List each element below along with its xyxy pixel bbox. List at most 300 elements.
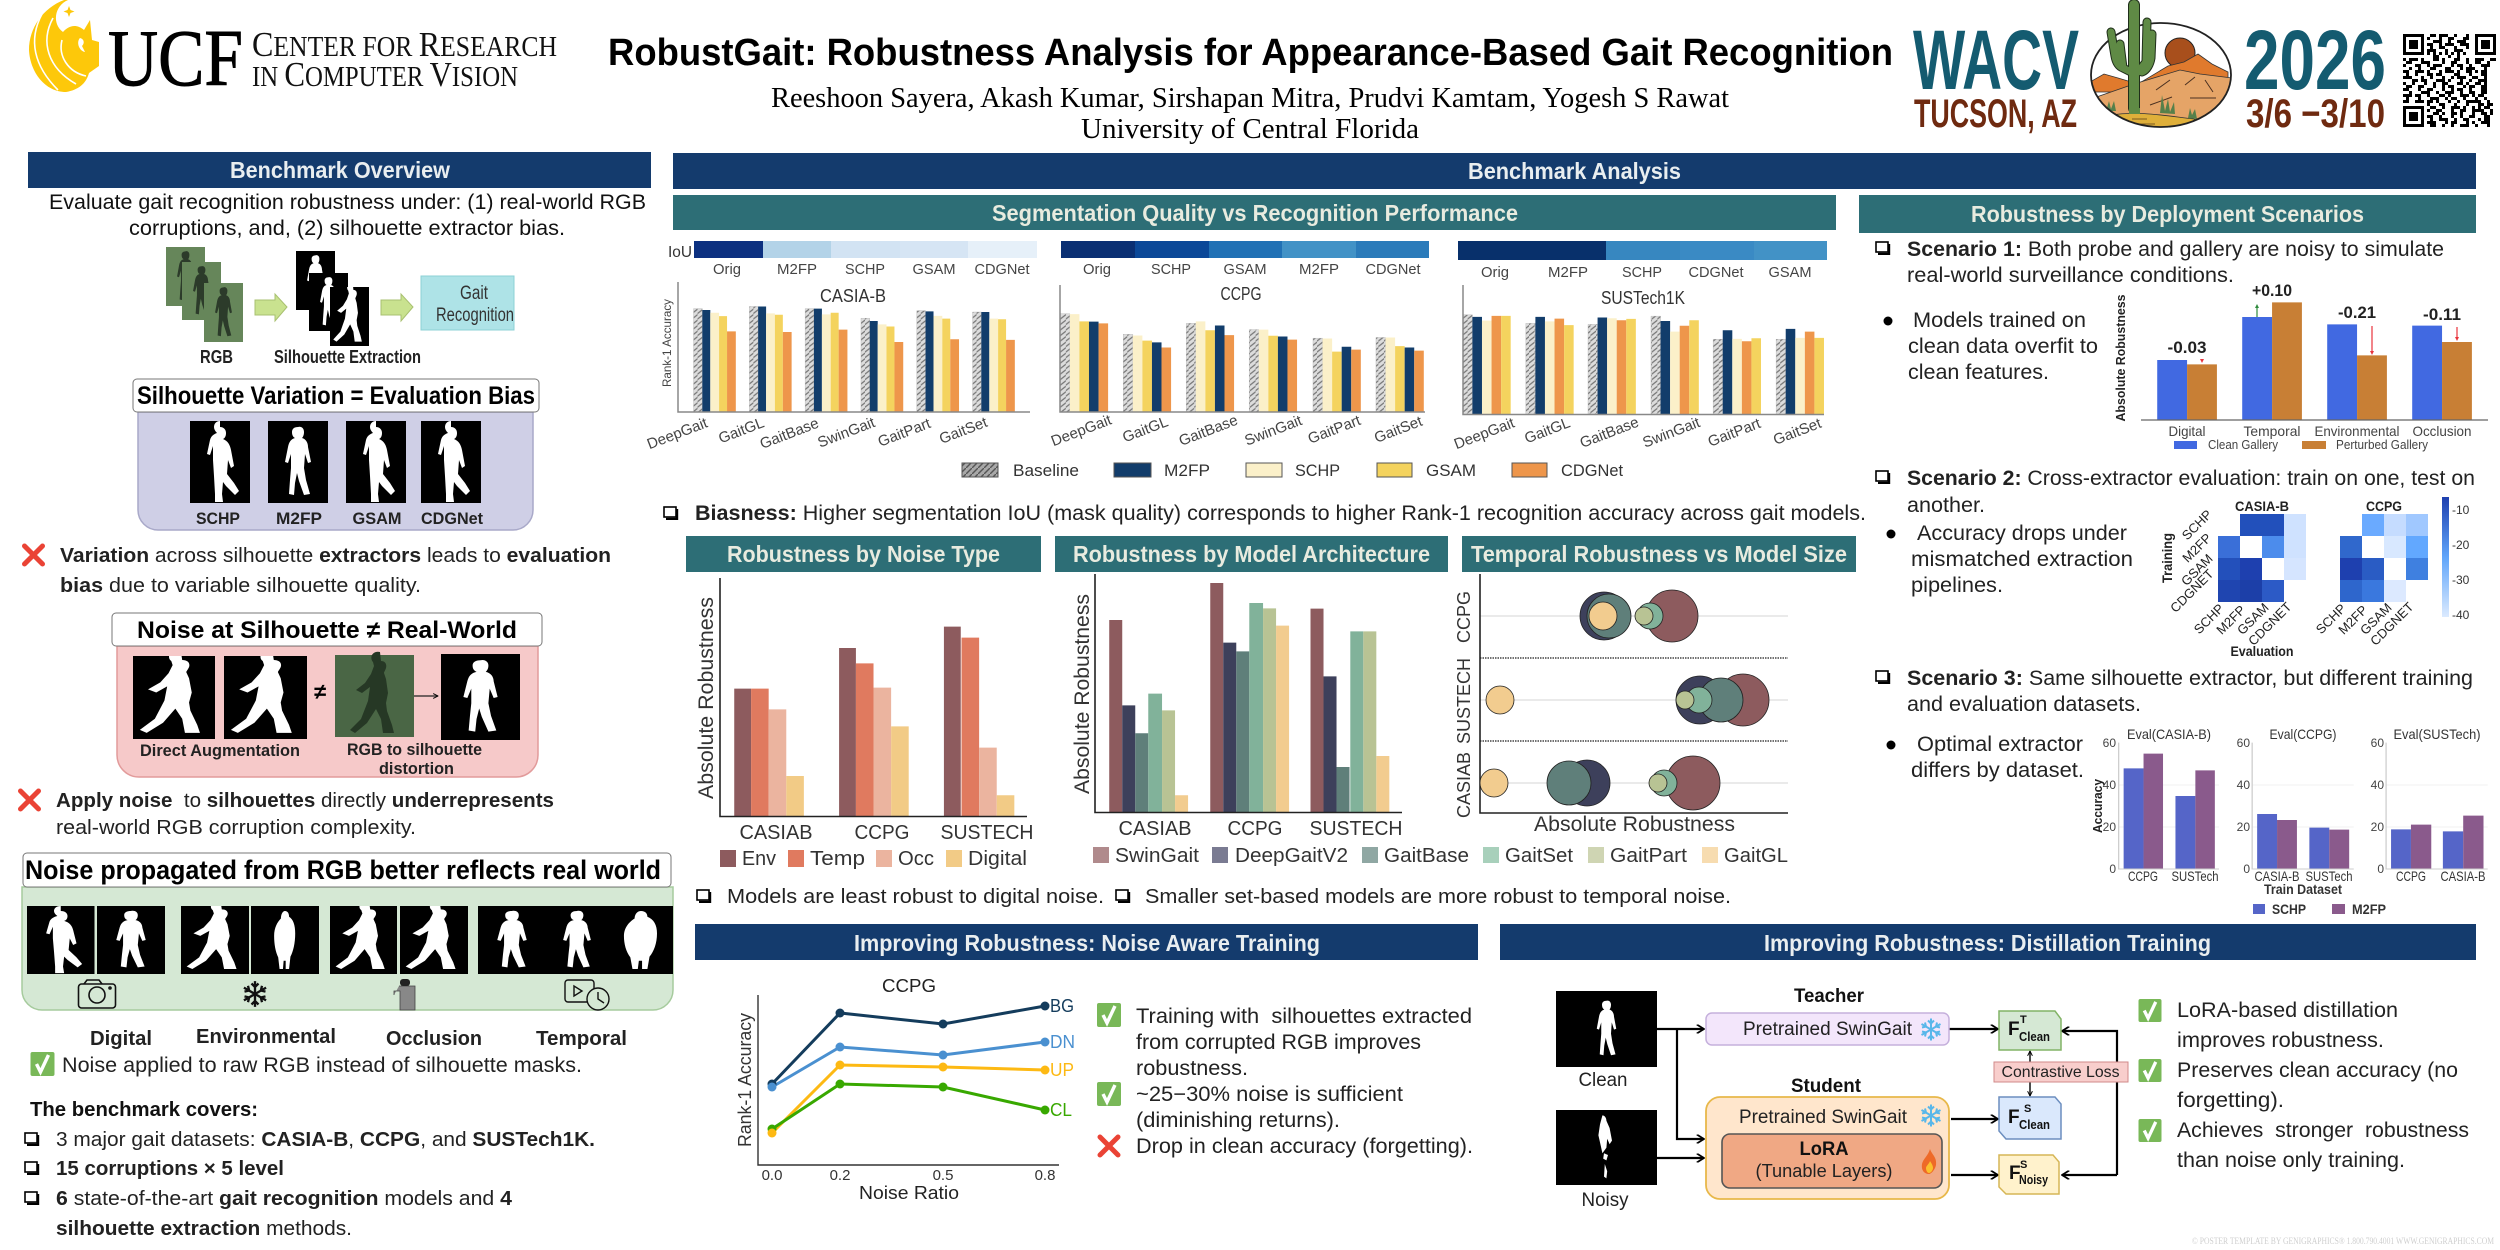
scenario 2 text: Scenario 2: Cross-extractor evaluation: train on one, test on: [1907, 467, 2475, 490]
IoU heatmap: CCPG: GSAM: [1224, 261, 1266, 278]
finding text 3: Drop in clean accuracy (forgetting).: [1136, 1135, 1473, 1158]
noise category labels: Digital: [90, 1028, 152, 1050]
icon: red cross: [24, 546, 42, 564]
teacher block: Pretrained SwinGait: [1743, 1019, 1913, 1040]
takeaways under charts: [697, 886, 1731, 908]
extractor silhouettes: [190, 421, 481, 503]
list heading: The benchmark covers:: [30, 1099, 258, 1121]
bar chart: CCPG accuracy: CCPG: [1220, 284, 1262, 304]
LoRA tunable layers: [1722, 1134, 1942, 1188]
panel: robustness by noise type: [686, 536, 1041, 870]
callout text: [56, 790, 554, 839]
feature F noisy student: [1999, 1155, 2059, 1194]
label RGB: RGB: [200, 347, 233, 367]
distillation findings: [2138, 999, 2469, 1172]
teacher label: Teacher: [1794, 986, 1865, 1007]
bar chart: CASIA-B accuracy: GaitGL: [716, 414, 767, 447]
logo text line 2: IN COMPUTER VISION: [252, 55, 518, 94]
noise aware findings: [1097, 1003, 1473, 1158]
bar chart: SUSTech1K accuracy: GaitBase: [1578, 414, 1641, 452]
bar chart: CASIA-B accuracy: [645, 282, 1030, 453]
feature F noisy student: F: [2009, 1163, 2021, 1184]
header: UCF logo: [29, 0, 557, 103]
icon: gold pegasus flame: [29, 0, 99, 92]
bar chart: SUSTech1K accuracy: GaitPart: [1706, 415, 1764, 451]
noisy input: Noisy: [1582, 1190, 1629, 1211]
bar charts: scenario 3 cross-dataset accuracy: 0: [2243, 862, 2250, 876]
silhouette samples: [27, 902, 673, 974]
gait recognition box: Recognition: [436, 305, 514, 326]
bar chart: noise type: Absolute Robustness: [695, 597, 718, 799]
IoU heatmap: CASIA-B: GSAM: [912, 261, 956, 278]
IoU heatmap: SUSTech1K: GSAM: [1768, 264, 1812, 281]
IoU heatmap: SUSTech1K: CDGNet: [1688, 264, 1744, 281]
bar charts: scenario 3 cross-dataset accuracy: 60: [2237, 736, 2250, 750]
scenario 1 text: clean features.: [1908, 361, 2049, 384]
pipeline diagram: [166, 247, 514, 367]
bar charts: scenario 3 cross-dataset accuracy: CCPG: [2128, 868, 2158, 884]
heading: [1055, 536, 1448, 572]
bar charts: scenario 3 cross-dataset accuracy: Eval(CASIA-B): [2127, 726, 2211, 742]
lavender panel: [138, 412, 533, 530]
legend: model architecture: GaitPart: [1610, 845, 1687, 867]
RGB frames stack: [166, 247, 243, 342]
IoU heatmap: CASIA-B: SCHP: [845, 261, 885, 278]
finding text 2: ~25−30% noise is sufficient: [1136, 1083, 1403, 1106]
finding text 2: Preserves clean accuracy (no: [2177, 1059, 2458, 1082]
bar chart: model architecture: SUSTECH: [1310, 818, 1402, 840]
heatmap colorbar: -10: [2452, 503, 2470, 517]
bar chart: CCPG accuracy: [1049, 284, 1426, 450]
card: noise at silhouette: [112, 613, 542, 778]
scenario 2 text: pipelines.: [1911, 574, 2003, 597]
biasness note: [664, 502, 1866, 525]
bar charts: scenario 3 cross-dataset accuracy: 40: [2237, 778, 2250, 792]
bar chart: scenario 1 gallery comparison: -0.03: [2168, 338, 2206, 357]
IoU heatmap: CCPG: M2FP: [1299, 261, 1339, 278]
clean input: Clean: [1578, 1070, 1628, 1091]
feature F clean student: S: [2024, 1103, 2031, 1115]
bar chart: CCPG accuracy: GaitBase: [1177, 412, 1240, 450]
distillation diagram: [1556, 986, 2128, 1211]
IoU heatmap: CASIA-B: Orig: [713, 261, 741, 278]
list item: datasets: 3 major gait datasets: CASIA-B, CCPG, and SUSTech1K.: [56, 1129, 595, 1151]
finding text 3: [2177, 1119, 2469, 1172]
line chart: 0.8: [1035, 1167, 1055, 1184]
IoU heatmap: CASIA-B: [668, 241, 1037, 278]
bar chart: scenario 1 gallery comparison: Perturbed Gallery: [2336, 437, 2428, 452]
noise category labels: Environmental: [196, 1026, 336, 1048]
teacher block: [1706, 1013, 1949, 1045]
IoU heatmap: CASIA-B: CDGNet: [974, 261, 1030, 278]
heatmap: cross-extractor CASIA-B: GSAM: [2234, 600, 2272, 638]
scenario 3 text: Scenario 3: Same silhouette extractor, but different training: [1907, 667, 2473, 690]
bar chart: scenario 1 gallery comparison: Absolute Robustness: [2113, 294, 2128, 422]
feature F noisy student: Noisy: [2019, 1172, 2049, 1187]
note: raw RGB noise: [30, 1052, 582, 1077]
biasness text: Biasness: Higher segmentation IoU (mask quality) corresponds to higher Rank-1 recognition accuracy across gait models.: [695, 502, 1866, 525]
scenario 3 text: Optimal extractor: [1917, 733, 2083, 756]
line chart: Rank-1 Accuracy: [735, 1013, 755, 1147]
icon: checkbox: [664, 507, 677, 519]
heading: segmentation quality: [673, 195, 1836, 230]
noise category labels: Occlusion: [386, 1028, 482, 1050]
heatmap: cross-extractor CASIA-B: Evaluation: [2230, 643, 2294, 659]
heading: [1859, 195, 2476, 233]
icon: flame: [1922, 1149, 1936, 1174]
extractor labels: GSAM: [352, 509, 402, 528]
bar chart: scenario 1 gallery comparison: Environmental: [2314, 423, 2400, 439]
heading: [1500, 924, 2476, 960]
2026 wordmark: 2026: [2244, 13, 2386, 107]
line chart: CL: [1050, 1100, 1072, 1120]
line chart: 0.5: [933, 1167, 953, 1184]
icon: camera: [78, 980, 116, 1008]
line chart: 0.0: [762, 1167, 782, 1184]
list item: models: [25, 1188, 513, 1240]
icon: snowflake: [244, 981, 266, 1007]
bar chart: CASIA-B accuracy: GaitBase: [758, 415, 821, 453]
finding text 1: improves robustness.: [2177, 1029, 2384, 1052]
bar charts: scenario 3 cross-dataset accuracy: 20: [2237, 820, 2250, 834]
conference dates: 3/6 −3/10: [2246, 92, 2385, 136]
heatmap: cross-extractor CCPG: [2313, 498, 2428, 649]
legend: model architecture: GaitBase: [1384, 845, 1469, 867]
heatmap: cross-extractor CASIA-B: CDGNET: [2245, 599, 2295, 649]
bar chart: SUSTech1K accuracy: GaitGL: [1522, 414, 1573, 447]
extractor labels: M2FP: [276, 509, 322, 528]
authors: Reeshoon Sayera, Akash Kumar, Sirshapan Mitra, Prudvi Kamtam, Yogesh S Rawat: [771, 83, 1729, 114]
label direct augmentation: Direct Augmentation: [140, 741, 300, 760]
QR code: [2403, 34, 2496, 127]
bar charts: scenario 3 cross-dataset accuracy: [2090, 726, 2488, 917]
finding text 3: than noise only training.: [2177, 1149, 2405, 1172]
scenario 2 text: Accuracy drops under: [1917, 522, 2127, 545]
bubble chart: [1454, 574, 1788, 836]
panel: temporal robustness vs model size: [1454, 536, 1856, 836]
finding text 1: from corrupted RGB improves: [1136, 1031, 1421, 1054]
bar chart: scenario 1 gallery comparison: Temporal: [2244, 423, 2300, 439]
bar charts: scenario 3 cross-dataset accuracy: CCPG: [2396, 868, 2426, 884]
heatmap: cross-extractor CASIA-B: M2FP: [2213, 602, 2248, 637]
heading: Benchmark Overview: Benchmark Overview: [230, 157, 450, 183]
legend: model architecture: [1093, 845, 1788, 867]
scenario 2 text: [1876, 467, 2475, 597]
label RGB distortion: RGB to silhouette: [347, 740, 482, 759]
bar chart: noise type: SUSTECH: [940, 822, 1034, 844]
bar charts: scenario 3 cross-dataset accuracy: SCHP: [2272, 901, 2306, 917]
takeaway: temporal noise: Smaller set-based models are more robust to temporal noise.: [1145, 886, 1731, 908]
bar charts: scenario 3 cross-dataset accuracy: Accuracy: [2090, 778, 2105, 833]
heatmap: cross-extractor CCPG: M2FP: [2335, 602, 2370, 637]
legend: model architecture: SwinGait: [1115, 845, 1199, 867]
heading: segmentation quality: Segmentation Quality vs Recognition Performance: [992, 200, 1518, 226]
line chart: BG: [1050, 996, 1074, 1016]
feature F clean teacher: T: [2020, 1014, 2027, 1026]
IoU heatmap: SUSTech1K: Orig: [1481, 264, 1509, 281]
heatmap: cross-extractor CCPG: CCPG: [2366, 498, 2402, 514]
feature F noisy student: S: [2020, 1159, 2027, 1171]
gait recognition box: [421, 276, 514, 330]
bar chart: SUSTech1K accuracy: [1452, 285, 1825, 453]
bar charts: scenario 3 cross-dataset accuracy: 20: [2103, 820, 2116, 834]
extractor labels: CDGNet: [421, 509, 483, 528]
IoU heatmap: SUSTech1K: SCHP: [1622, 264, 1662, 281]
callout text: Variation across silhouette extractors leads to evaluation: [60, 545, 611, 567]
bar charts: scenario 3 cross-dataset accuracy: Eval(CCPG): [2270, 726, 2336, 742]
IoU heatmap: CASIA-B: IoU: [668, 244, 692, 261]
heatmap: cross-extractor CASIA-B: SCHP: [2191, 601, 2227, 637]
scenario 2 text: another.: [1907, 494, 1985, 517]
bar charts: scenario 3 cross-dataset accuracy: Train Dataset: [2264, 881, 2342, 897]
IoU heatmap: SUSTech1K: [1458, 241, 1827, 281]
heading: Improving Robustness: Noise Aware Training: [854, 930, 1320, 956]
card: silhouette variation: [133, 379, 539, 530]
heading: [686, 536, 1041, 572]
bar charts: scenario 3 cross-dataset accuracy: 20: [2371, 820, 2384, 834]
logo text line 1: CENTER FOR RESEARCH: [252, 25, 557, 64]
bar chart: SUSTech1K accuracy: GaitSet: [1771, 415, 1825, 449]
heatmap: cross-extractor CASIA-B: Training: [2159, 533, 2175, 583]
callout text: bias due to variable silhouette quality.: [60, 575, 421, 597]
not-equal sign: ≠: [314, 679, 326, 704]
bar charts: scenario 3 cross-dataset accuracy: SUSTech: [2306, 868, 2352, 884]
IoU heatmap: CCPG: SCHP: [1151, 261, 1191, 278]
bubble chart: CASIAB: [1454, 752, 1474, 818]
bar chart: CCPG accuracy: SwinGait: [1242, 412, 1305, 449]
bar charts: scenario 3 cross-dataset accuracy: 0: [2377, 862, 2384, 876]
legend: noise type: [720, 848, 1027, 870]
feature F clean teacher: [1999, 1011, 2061, 1050]
bar charts: scenario 3 cross-dataset accuracy: 40: [2371, 778, 2384, 792]
heatmap: cross-extractor CASIA-B: [2159, 498, 2306, 659]
legend: noise type: Env: [742, 848, 776, 870]
icon: green check: [30, 1052, 54, 1076]
bar chart: CASIA-B accuracy: Rank-1 Accuracy: [660, 299, 674, 387]
bar chart: CCPG accuracy: DeepGait: [1049, 411, 1115, 450]
green panel: [22, 887, 673, 1010]
card heading: Silhouette Variation = Evaluation Bias: [137, 382, 535, 410]
bar chart: SUSTech1K accuracy: SwinGait: [1640, 414, 1703, 451]
benchmark coverage list: [25, 1099, 595, 1240]
heading: Temporal Robustness vs Model Size: [1471, 541, 1847, 567]
arrow to recognition: [381, 294, 413, 321]
bar chart: model architecture: CASIAB: [1118, 818, 1192, 840]
finding text 1: Training with silhouettes extracted: [1136, 1005, 1472, 1028]
bar charts: scenario 3 cross-dataset accuracy: SUSTech: [2172, 868, 2218, 884]
contrastive loss box: Contrastive Loss: [2002, 1064, 2120, 1081]
heatmap colorbar: [2442, 497, 2470, 622]
panel: noise aware training: [695, 924, 1478, 1203]
bar chart: SUSTech1K accuracy: DeepGait: [1452, 414, 1518, 453]
bar chart: CASIA-B accuracy: CASIA-B: [820, 286, 886, 306]
heatmap: cross-extractor CCPG: GSAM: [2357, 600, 2395, 638]
bar charts: scenario 3 cross-dataset accuracy: CASIA-B: [2254, 868, 2300, 884]
bubble chart: SUSTECH: [1454, 658, 1474, 744]
bar chart: CASIA-B accuracy: GaitSet: [937, 414, 991, 448]
icon: desert cactus badge: [2088, 5, 2232, 138]
bar charts: scenario 3 cross-dataset accuracy: 60: [2103, 736, 2116, 750]
heatmap: cross-extractor CASIA-B: CASIA-B: [2235, 498, 2289, 514]
legend: model architecture: GaitGL: [1724, 845, 1788, 867]
heatmap: cross-extractor CASIA-B: SCHP: [2179, 507, 2215, 543]
heatmap: cross-extractor CASIA-B: CDGNET: [2167, 566, 2217, 616]
icon: red cross: [20, 791, 38, 809]
LoRA tunable layers: LoRA: [1800, 1139, 1849, 1160]
heading: Robustness by Noise Type: [727, 541, 1000, 567]
noisy RGB frame: [335, 652, 414, 737]
feature F clean student: F: [2008, 1107, 2020, 1128]
finding text 2: [1136, 1083, 1403, 1132]
arrow RGB to silhouette: [414, 695, 438, 697]
panel: distillation training: [1500, 924, 2476, 1211]
list item: models: silhouette extraction methods.: [56, 1218, 352, 1240]
extractor legend: GSAM: [1426, 461, 1476, 480]
scenario 3 text: [1876, 667, 2473, 782]
bar chart: CASIA-B accuracy: GaitPart: [876, 415, 934, 451]
arrows: [1657, 1029, 2117, 1175]
finding text 2: forgetting).: [2177, 1089, 2284, 1112]
extractor legend: CDGNet: [1561, 461, 1623, 480]
clean input: [1556, 991, 1657, 1091]
heatmap: cross-extractor CASIA-B: M2FP: [2179, 530, 2214, 565]
bar chart: scenario 1 gallery comparison: +0.10: [2252, 281, 2292, 300]
direct augmentation images: [133, 651, 307, 739]
bar chart: model architecture: Absolute Robustness: [1071, 594, 1094, 794]
bar chart: scenario 1 gallery comparison: Digital: [2168, 423, 2206, 439]
bar chart: scenario 1 gallery comparison: -0.11: [2423, 305, 2461, 324]
arrow to silhouette extraction: [255, 294, 287, 321]
intro text: corruptions, and, (2) silhouette extractor bias.: [129, 217, 565, 240]
bar chart: SUSTech1K accuracy: SUSTech1K: [1601, 288, 1685, 308]
heading: Benchmark Analysis: Benchmark Analysis: [1468, 158, 1681, 184]
scenario 1 text: Scenario 1: Both probe and gallery are noisy to simulate: [1907, 238, 2444, 261]
finding text 2: (diminishing returns).: [1136, 1109, 1340, 1132]
callout: apply noise: [20, 790, 554, 839]
header: WACV 2026 logo: [1913, 5, 2386, 138]
bar charts: scenario 3 cross-dataset accuracy: Eval(SUSTech): [2394, 726, 2480, 742]
finding text 1: [2177, 999, 2398, 1052]
IoU heatmap: CASIA-B: M2FP: [777, 261, 817, 278]
bar charts: scenario 3 cross-dataset accuracy: 0: [2109, 862, 2116, 876]
finding text 1: LoRA-based distillation: [2177, 999, 2398, 1022]
scenario 1 text: Models trained on: [1913, 309, 2086, 332]
icon: check: [1097, 1003, 1121, 1027]
line chart: 0.2: [830, 1167, 850, 1184]
label RGB distortion: [347, 740, 482, 778]
scenario 2 text: mismatched extraction: [1911, 548, 2133, 571]
IoU heatmap: CCPG: Orig: [1083, 261, 1111, 278]
bar charts: scenario 3 cross-dataset accuracy: CASIA-B: [2440, 868, 2486, 884]
bar chart: CCPG accuracy: GaitSet: [1372, 413, 1426, 447]
extractor legend: SCHP: [1295, 461, 1340, 480]
bar chart: noise type: [695, 578, 1034, 844]
bar chart: CASIA-B accuracy: SwinGait: [815, 414, 878, 451]
heading: Robustness by Model Architecture: [1073, 541, 1430, 567]
affiliation: University of Central Florida: [1081, 114, 1420, 145]
heatmap: cross-extractor CASIA-B: GSAM: [2178, 551, 2216, 589]
feature F clean student: [1999, 1097, 2061, 1139]
line chart: DN: [1050, 1032, 1075, 1052]
line chart: UP: [1050, 1060, 1074, 1080]
bar chart: scenario 1 gallery comparison: Occlusion: [2412, 423, 2472, 439]
extractor legend: M2FP: [1164, 461, 1210, 480]
callout text: [60, 545, 611, 597]
line chart: [735, 976, 1075, 1203]
bubble chart: CCPG: [1454, 591, 1474, 643]
feature F clean teacher: F: [2008, 1019, 2020, 1040]
list item: corruptions: 15 corruptions × 5 level: [56, 1158, 284, 1180]
LoRA tunable layers: (Tunable Layers): [1756, 1161, 1892, 1181]
panel: segmentation quality: [645, 195, 1866, 525]
bar chart: noise type: CASIAB: [740, 822, 812, 844]
legend: model architecture: DeepGaitV2: [1235, 845, 1348, 867]
label Silhouette Extraction: Silhouette Extraction: [274, 347, 421, 367]
heading: [1462, 536, 1856, 572]
finding text 1: [1136, 1005, 1472, 1080]
line chart: CCPG: [882, 976, 936, 996]
finding text 1: robustness.: [1136, 1057, 1248, 1080]
student block: [1706, 1097, 1949, 1199]
panel: robustness by deployment scenarios: [1859, 195, 2488, 917]
intro text: [49, 191, 646, 240]
intro text: Evaluate gait recognition robustness under: (1) real-world RGB: [49, 191, 646, 214]
label RGB distortion: distortion: [379, 759, 454, 778]
title: RobustGait: Robustness Analysis for Appearance-Based Gait Recognition: [608, 32, 1893, 74]
feature F clean student: Clean: [2019, 1117, 2050, 1132]
icon: check: [2138, 1119, 2162, 1142]
bar chart: noise type: CCPG: [854, 822, 910, 844]
heading: Improving Robustness: Distillation Training: [1764, 930, 2211, 956]
callout text: Apply noise to silhouettes directly underrepresents: [56, 790, 554, 812]
heading: [695, 924, 1478, 960]
panel: robustness by model architecture: [1055, 536, 1788, 867]
heatmap: cross-extractor CCPG: CDGNET: [2367, 599, 2417, 649]
icon: check: [1097, 1082, 1121, 1106]
icon: video clock: [565, 980, 609, 1010]
extractor legend: [962, 461, 1623, 480]
scenario 1 text: real-world surveillance conditions.: [1907, 264, 2234, 287]
noise category labels: [90, 1026, 627, 1050]
bar charts: scenario 3 cross-dataset accuracy: M2FP: [2352, 901, 2386, 917]
legend: model architecture: GaitSet: [1505, 845, 1573, 867]
card heading: Noise at Silhouette ≠ Real-World: [137, 617, 517, 644]
legend: noise type: Occ: [898, 848, 934, 870]
takeaway: digital noise: Models are least robust to digital noise.: [727, 886, 1104, 908]
finding text 3: Achieves stronger robustness: [2177, 1119, 2469, 1142]
icon: red cross: [1100, 1137, 1118, 1155]
scenario 1 text: [1876, 238, 2444, 384]
bar chart: CASIA-B accuracy: DeepGait: [645, 414, 711, 453]
callout text: real-world RGB corruption complexity.: [56, 817, 416, 839]
legend: noise type: Temp: [810, 848, 865, 870]
IoU heatmap: CCPG: [1061, 241, 1429, 278]
noise category labels: Temporal: [536, 1028, 627, 1050]
card heading: Noise propagated from RGB better reflects real world: [25, 855, 661, 885]
panel: benchmark overview: [20, 152, 673, 1240]
heatmap: cross-extractor CCPG: SCHP: [2313, 601, 2349, 637]
icon: check: [2138, 999, 2162, 1022]
IoU heatmap: CCPG: CDGNet: [1366, 261, 1421, 278]
bar chart: CCPG accuracy: GaitPart: [1306, 412, 1364, 448]
WACV wordmark: WACV: [1913, 13, 2079, 107]
bar chart: model architecture: CCPG: [1228, 818, 1282, 840]
extractor labels: SCHP: [196, 509, 240, 528]
logo wordmark UCF: UCF: [108, 15, 243, 103]
feature F clean teacher: Clean: [2019, 1029, 2050, 1044]
finding text 2: [2177, 1059, 2458, 1112]
bar chart: scenario 1 gallery comparison: Clean Gallery: [2208, 437, 2278, 452]
